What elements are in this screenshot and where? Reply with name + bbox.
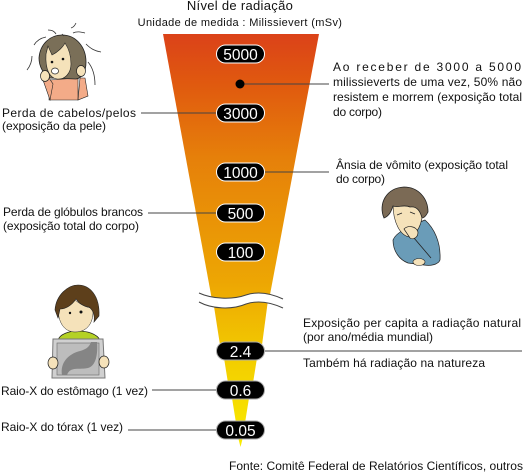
text: 3000 to 5000 <box>333 60 522 119</box>
value pill 0.05: 0.05 <box>225 423 256 440</box>
text: white blood cells <box>3 205 143 233</box>
value pill 100: 100 <box>228 245 254 262</box>
text: natural radiation: Também há radiação na natureza <box>303 356 485 370</box>
radiation funnel <box>163 34 319 447</box>
value pill 3000 <box>216 104 264 123</box>
icon: girl losing hair <box>27 23 101 100</box>
value pill 1000: 1000 <box>223 165 258 182</box>
text: vomiting <box>336 157 508 186</box>
text: 3000 to 5000: do corpo) <box>333 105 382 119</box>
text: hair loss: Perda de cabelos/pelos <box>2 106 136 120</box>
marker dot <box>236 80 244 88</box>
source: Fonte: Comitê Federal de Relatórios Científicos, outros <box>229 459 523 473</box>
title <box>138 0 342 29</box>
icon: boy holding x-ray <box>48 285 109 378</box>
text: 3000 to 5000: milissieverts de uma vez, 50% não <box>333 75 522 89</box>
value pill 500 <box>216 204 264 223</box>
text: hair loss <box>2 106 136 133</box>
value pill 1000 <box>216 163 264 182</box>
text: 3000 to 5000: Ao receber de 3000 a 5000 <box>333 60 521 74</box>
value pill 0.05 <box>216 421 264 440</box>
text: vomiting: Ânsia de vômito (exposição total <box>336 157 508 172</box>
value pill 0.6: 0.6 <box>230 383 251 400</box>
text: 3000 to 5000: resistem e morrem (exposição total <box>333 90 522 104</box>
title: Unidade de medida : Milissievert (mSv) <box>138 17 342 29</box>
text: natural radiation: (por ano/média mundial) <box>303 330 433 344</box>
value pill 2.4: 2.4 <box>230 344 252 361</box>
text: chest x-ray: Raio-X do tórax (1 vez) <box>1 420 123 434</box>
icon: nauseous boy <box>382 187 440 266</box>
value pill 0.6 <box>216 381 264 400</box>
text: vomiting: do corpo) <box>336 172 385 186</box>
text: natural radiation: Exposição per capita a radiação natural <box>303 316 521 330</box>
text: natural radiation <box>303 316 521 370</box>
value pill 100 <box>216 243 264 262</box>
value pill 3000: 3000 <box>223 106 258 123</box>
text: white blood cells: Perda de glóbulos brancos <box>3 205 143 219</box>
text: hair loss: (exposição da pele) <box>2 119 106 133</box>
value pill 5000 <box>216 45 264 64</box>
text: white blood cells: (exposição total do corpo) <box>3 219 139 233</box>
value pill 5000: 5000 <box>223 47 258 64</box>
text: stomach x-ray: Raio-X do estômago (1 vez) <box>1 384 148 398</box>
leader lines <box>128 84 522 430</box>
value pill 500: 500 <box>228 206 254 223</box>
value pill 2.4 <box>216 342 264 361</box>
